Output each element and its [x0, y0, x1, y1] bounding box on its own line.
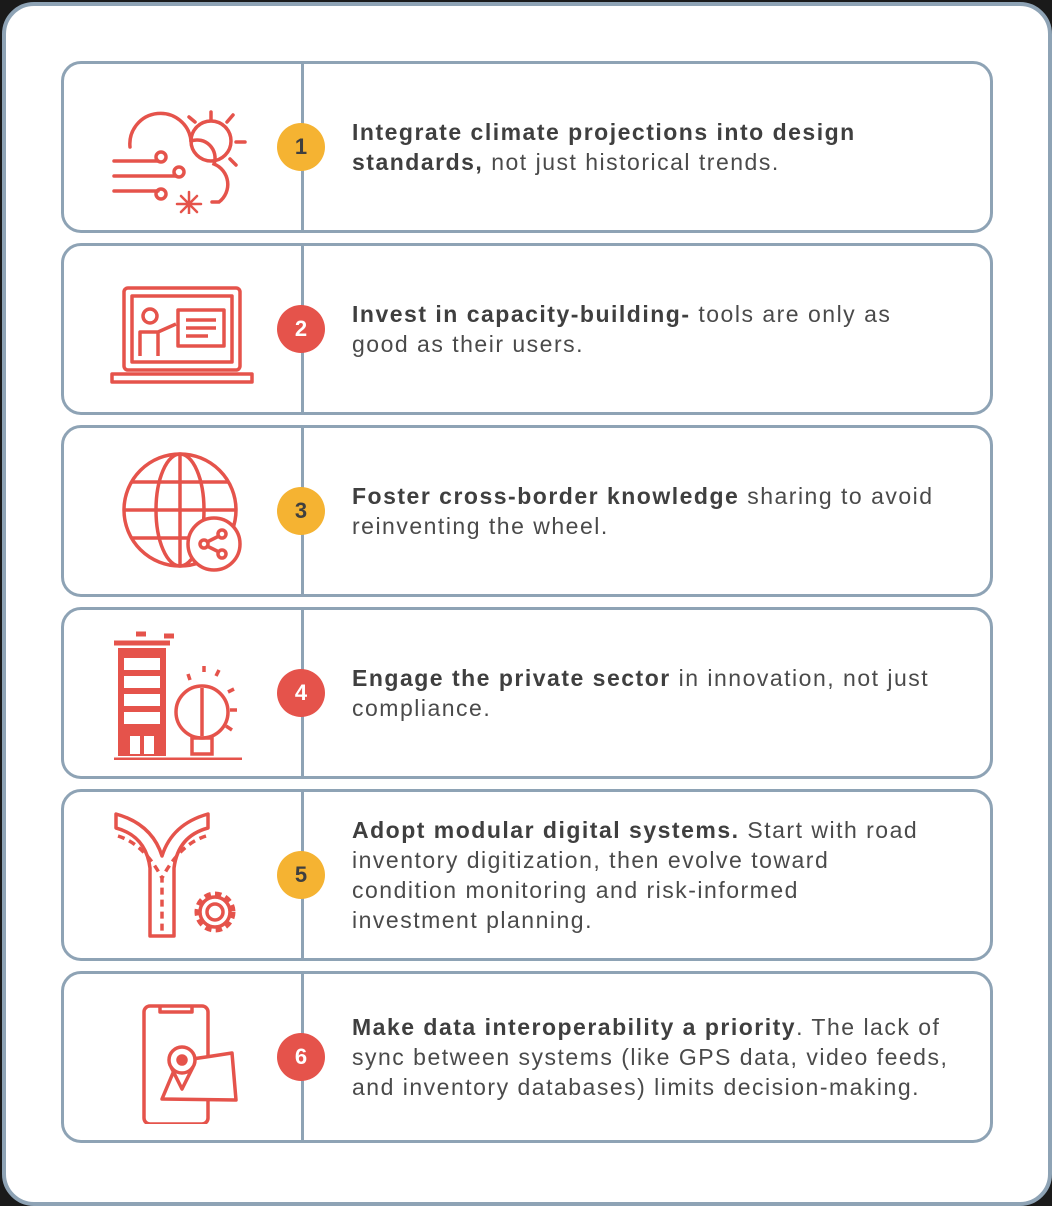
text 5: inventory digitization, then evolve toward [352, 847, 829, 873]
text 6: sync between systems (like GPS data, video feeds, [352, 1044, 948, 1070]
card 3: knowledge sharing [61, 425, 993, 597]
text 2: Invest in capacity-building- tools are only as [352, 301, 891, 327]
number 2: 2 [295, 316, 307, 341]
icon: road fork with gear [114, 812, 236, 938]
number 5 [277, 851, 325, 899]
text 5: condition monitoring and risk-informed [352, 877, 799, 903]
text 3: Foster cross-border knowledge sharing to avoid [352, 483, 934, 509]
text 5 [352, 817, 918, 933]
text 5: investment planning. [352, 907, 593, 933]
icon: laptop presentation [110, 286, 254, 384]
card 5: modular systems [61, 789, 993, 961]
text 4 [352, 665, 929, 721]
divider [301, 974, 304, 1140]
text 4: Engage the private sector in innovation, not just [352, 665, 929, 691]
text 1: standards, not just historical trends. [352, 149, 780, 175]
text 5: Adopt modular digital systems. Start with road [352, 817, 918, 843]
card 4: private sector [61, 607, 993, 779]
number 2 [277, 305, 325, 353]
number 3 [277, 487, 325, 535]
card 6: data interoperability [61, 971, 993, 1143]
number 3: 3 [295, 498, 307, 523]
icon: globe share [122, 452, 242, 572]
icon: weather cloud sun wind snow [112, 110, 247, 214]
text 6: and inventory databases) limits decision-making. [352, 1074, 920, 1100]
number 1: 1 [295, 134, 307, 159]
text 2: good as their users. [352, 331, 584, 357]
text 1: Integrate climate projections into design [352, 119, 856, 145]
divider [301, 64, 304, 230]
card 2: capacity building [61, 243, 993, 415]
text 6 [352, 1014, 948, 1100]
number 6 [277, 1033, 325, 1081]
icon: building and brain bulb [114, 632, 242, 760]
divider [301, 428, 304, 594]
text 2 [352, 301, 891, 357]
divider [301, 246, 304, 412]
text 3 [352, 483, 934, 539]
number 4 [277, 669, 325, 717]
number 5: 5 [295, 862, 307, 887]
divider [301, 610, 304, 776]
card 1: climate projections [61, 61, 993, 233]
icon: phone with map pin [142, 1004, 238, 1124]
number 1 [277, 123, 325, 171]
text 6: Make data interoperability a priority. The lack of [352, 1014, 940, 1040]
text 3: reinventing the wheel. [352, 513, 609, 539]
number 6: 6 [295, 1044, 307, 1069]
text 4: compliance. [352, 695, 491, 721]
text 1 [352, 119, 856, 175]
number 4: 4 [295, 680, 307, 705]
divider [301, 792, 304, 958]
